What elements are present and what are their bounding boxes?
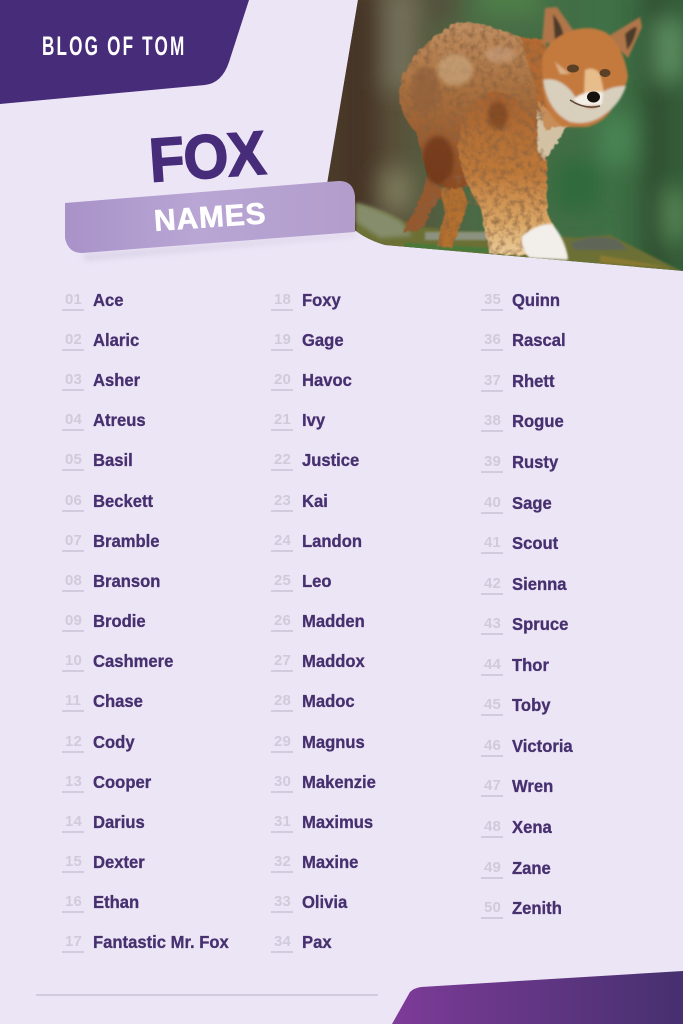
31 Maximus: Maximus	[302, 812, 373, 832]
07 Bramble: Bramble	[93, 531, 160, 551]
33 Olivia: Olivia	[302, 892, 347, 912]
46 Victoria: 46	[484, 737, 501, 754]
12 Cody	[62, 732, 135, 753]
37 Rhett: 37	[484, 372, 501, 389]
42 Sienna	[481, 573, 671, 597]
29 Magnus: Magnus	[302, 732, 365, 752]
15 Dexter: 15	[65, 853, 82, 870]
33 Olivia	[271, 892, 348, 913]
31 Maximus	[271, 812, 373, 833]
31 Maximus: 31	[274, 813, 291, 830]
03 Asher: Asher	[93, 370, 140, 390]
26 Madden	[271, 611, 365, 632]
14 Darius: Darius	[93, 812, 145, 832]
16 Ethan: 16	[65, 893, 82, 910]
fox figure	[395, 7, 642, 260]
23 Kai: Kai	[302, 491, 328, 511]
34 Pax: Pax	[302, 932, 332, 952]
50 Zenith: 50	[484, 899, 501, 916]
08 Branson: Branson	[93, 571, 160, 591]
05 Basil: Basil	[93, 450, 133, 470]
01 Ace	[62, 290, 124, 311]
22 Justice	[271, 450, 359, 471]
41 Scout	[481, 532, 671, 556]
40 Sage: Sage	[512, 493, 552, 513]
fox head	[542, 7, 642, 127]
25 Leo: 25	[274, 572, 291, 589]
10 Cashmere: Cashmere	[93, 651, 173, 671]
20 Havoc	[271, 370, 352, 391]
14 Darius	[62, 812, 145, 833]
41 Scout: 41	[484, 534, 501, 551]
49 Zane: Zane	[512, 858, 551, 878]
08 Branson	[62, 571, 160, 592]
03 Asher: 03	[65, 371, 82, 388]
27 Maddox	[271, 651, 365, 672]
06 Beckett: 06	[65, 492, 82, 509]
50 Zenith	[481, 897, 671, 921]
48 Xena: 48	[484, 818, 501, 835]
03 Asher	[62, 370, 140, 391]
04 Atreus: Atreus	[93, 410, 146, 430]
01 Ace: 01	[65, 291, 82, 308]
47 Wren: Wren	[512, 776, 553, 796]
39 Rusty: Rusty	[512, 452, 558, 472]
11 Chase: Chase	[93, 691, 143, 711]
28 Madoc: 28	[274, 692, 291, 709]
13 Cooper: Cooper	[93, 772, 151, 792]
36 Rascal: Rascal	[512, 330, 566, 350]
24 Landon: 24	[274, 532, 291, 549]
footer divider	[36, 994, 378, 996]
30 Makenzie: 30	[274, 773, 291, 790]
46 Victoria	[481, 735, 671, 759]
29 Magnus: 29	[274, 733, 291, 750]
45 Toby: Toby	[512, 695, 550, 715]
25 Leo	[271, 571, 332, 592]
30 Makenzie: Makenzie	[302, 772, 376, 792]
44 Thor: Thor	[512, 655, 549, 675]
23 Kai	[271, 491, 328, 512]
09 Brodie: 09	[65, 612, 82, 629]
21 Ivy: Ivy	[302, 410, 325, 430]
36 Rascal	[481, 330, 566, 351]
18 Foxy: 18	[274, 291, 291, 308]
fox photo	[327, 0, 683, 271]
37 Rhett	[481, 371, 554, 392]
brand name: BLOG OF TOM	[42, 31, 186, 61]
02 Alaric: 02	[65, 331, 82, 348]
20 Havoc: 20	[274, 371, 291, 388]
37 Rhett: Rhett	[512, 371, 554, 391]
35 Quinn: 35	[484, 291, 501, 308]
42 Sienna: Sienna	[512, 574, 567, 594]
41 Scout: Scout	[512, 533, 558, 553]
32 Maxine: 32	[274, 853, 291, 870]
48 Xena: Xena	[512, 817, 552, 837]
15 Dexter: Dexter	[93, 852, 145, 872]
13 Cooper	[62, 772, 152, 793]
49 Zane	[481, 857, 671, 881]
20 Havoc: Havoc	[302, 370, 352, 390]
09 Brodie	[62, 611, 146, 632]
46 Victoria: Victoria	[512, 736, 573, 756]
02 Alaric	[62, 330, 139, 351]
27 Maddox: 27	[274, 652, 291, 669]
40 Sage: 40	[484, 494, 501, 511]
16 Ethan: Ethan	[93, 892, 139, 912]
05 Basil	[62, 450, 133, 471]
16 Ethan	[62, 892, 139, 913]
19 Gage	[271, 330, 344, 351]
ribbon	[65, 181, 359, 260]
10 Cashmere	[62, 651, 173, 672]
footer banner	[383, 965, 683, 1024]
06 Beckett: Beckett	[93, 491, 153, 511]
49 Zane: 49	[484, 859, 501, 876]
26 Madden: 26	[274, 612, 291, 629]
50 Zenith: Zenith	[512, 898, 562, 918]
47 Wren	[481, 775, 671, 799]
11 Chase: 11	[65, 692, 81, 709]
40 Sage	[481, 492, 671, 516]
08 Branson: 08	[65, 572, 82, 589]
title: fox: FOX	[147, 119, 267, 196]
35 Quinn: Quinn	[512, 290, 560, 310]
32 Maxine	[271, 852, 358, 873]
45 Toby	[481, 694, 671, 718]
43 Spruce	[481, 613, 671, 637]
45 Toby: 45	[484, 696, 501, 713]
07 Bramble	[62, 531, 160, 552]
22 Justice: Justice	[302, 450, 359, 470]
24 Landon: Landon	[302, 531, 362, 551]
19 Gage: 19	[274, 331, 291, 348]
43 Spruce: 43	[484, 615, 501, 632]
14 Darius: 14	[65, 813, 82, 830]
34 Pax	[271, 932, 332, 953]
33 Olivia: 33	[274, 893, 291, 910]
12 Cody: 12	[65, 733, 82, 750]
34 Pax: 34	[274, 933, 291, 950]
moss ground	[355, 201, 682, 271]
21 Ivy	[271, 410, 326, 431]
04 Atreus: 04	[65, 411, 82, 428]
13 Cooper: 13	[65, 773, 82, 790]
05 Basil: 05	[65, 451, 82, 468]
07 Bramble: 07	[65, 532, 82, 549]
18 Foxy: Foxy	[302, 290, 341, 310]
32 Maxine: Maxine	[302, 852, 358, 872]
44 Thor: 44	[484, 656, 501, 673]
19 Gage: Gage	[302, 330, 344, 350]
48 Xena	[481, 816, 671, 840]
38 Rogue: Rogue	[512, 411, 564, 431]
header banner	[0, 0, 249, 104]
30 Makenzie	[271, 772, 376, 793]
39 Rusty	[481, 451, 671, 475]
44 Thor	[481, 654, 671, 678]
17 Fantastic Mr. Fox: Fantastic Mr. Fox	[93, 932, 229, 952]
39 Rusty: 39	[484, 453, 501, 470]
42 Sienna: 42	[484, 575, 501, 592]
tail tip	[522, 224, 568, 260]
title: names: NAMES	[153, 197, 267, 238]
02 Alaric: Alaric	[93, 330, 139, 350]
47 Wren: 47	[484, 777, 501, 794]
43 Spruce: Spruce	[512, 614, 568, 634]
12 Cody: Cody	[93, 732, 135, 752]
18 Foxy	[271, 290, 341, 311]
36 Rascal: 36	[484, 331, 501, 348]
23 Kai: 23	[274, 492, 291, 509]
15 Dexter	[62, 852, 145, 873]
38 Rogue: 38	[484, 412, 501, 429]
22 Justice: 22	[274, 451, 291, 468]
38 Rogue	[481, 411, 564, 432]
28 Madoc	[271, 691, 355, 712]
01 Ace: Ace	[93, 290, 124, 310]
10 Cashmere: 10	[65, 652, 82, 669]
27 Maddox: Maddox	[302, 651, 365, 671]
35 Quinn	[481, 290, 560, 311]
28 Madoc: Madoc	[302, 691, 355, 711]
25 Leo: Leo	[302, 571, 332, 591]
04 Atreus	[62, 410, 146, 431]
06 Beckett	[62, 491, 153, 512]
24 Landon	[271, 531, 362, 552]
21 Ivy: 21	[274, 411, 291, 428]
17 Fantastic Mr. Fox: 17	[65, 933, 82, 950]
11 Chase	[62, 691, 143, 712]
09 Brodie: Brodie	[93, 611, 146, 631]
26 Madden: Madden	[302, 611, 365, 631]
29 Magnus	[271, 732, 365, 753]
